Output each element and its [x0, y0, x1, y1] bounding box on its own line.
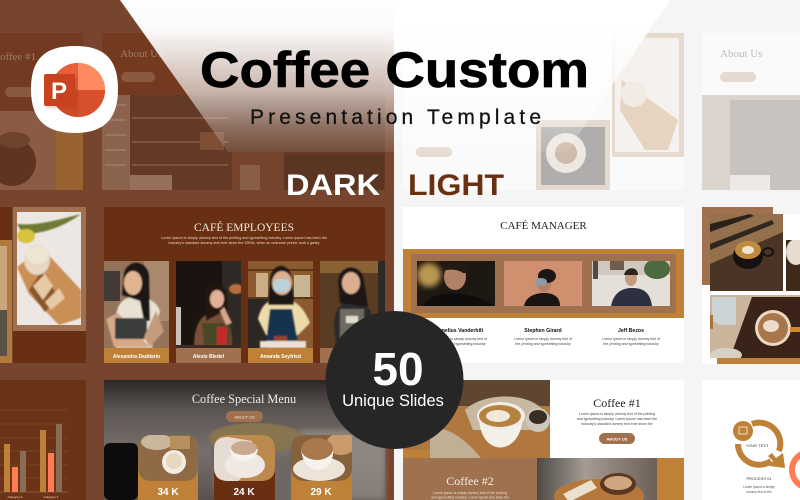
slide: dark coffee #1 (faded): offee #1 [0, 51, 36, 63]
photo: coffee and toast [537, 458, 657, 500]
chart category labels [8, 495, 59, 499]
manager: first column [429, 328, 487, 346]
heading: cafe manager: CAFÉ MANAGER [500, 220, 587, 232]
manager photo 2 [504, 261, 582, 306]
menu card 1: 34 K [157, 487, 179, 498]
panel: coffee #2: and typesetting industry. Lorem Ipsum has been the [431, 496, 509, 500]
employee photo 4 [320, 261, 385, 348]
name tag: Alexandra Daddario [104, 348, 169, 363]
slide: cafe manager [403, 207, 684, 363]
manager: first column: Lorem Ipsum is simply dummy text of [429, 337, 487, 341]
manager: Jeff Bezos [602, 328, 660, 346]
bar chart [4, 424, 62, 492]
slide: dark about us (faded): About Us [120, 48, 162, 60]
heading: cafe employees: CAFÉ EMPLOYEES [194, 220, 294, 234]
manager photo 1 [417, 261, 495, 306]
slide: light about us (faded) [702, 33, 800, 190]
heading: coffee special menu: Coffee Special Menu [192, 392, 296, 406]
photo: white cup on burlap [403, 380, 550, 458]
coffee #1 text: and typesetting industry. Lorem Ipsum has been the [577, 417, 657, 421]
name tag: Amanda Seyfried: Amanda Seyfried [260, 354, 301, 360]
button: about us [599, 433, 635, 444]
badge: 50 unique slides: Unique Slides [342, 392, 444, 410]
button: about us [226, 411, 263, 422]
slide: dark chart [0, 380, 86, 500]
badge: 50 unique slides: 50 [372, 343, 424, 395]
process 01 label: PROCESS 01 [746, 476, 772, 481]
slide: light about us (faded): About Us [720, 48, 762, 60]
panel: coffee #2: Coffee #2 [446, 474, 494, 488]
slide: light photo collage [702, 207, 800, 364]
slide: coffee special menu [104, 380, 385, 500]
slide: light coffee (faded) [403, 33, 684, 190]
photo: latte art top view [710, 295, 800, 358]
employee photo 1 [104, 261, 169, 348]
name tag: Alexandra Daddario: Alexandra Daddario [113, 354, 160, 360]
name tag: Alexis Bledel [176, 348, 241, 363]
menu card 2: 24 K [233, 487, 255, 498]
employees intro text: industry's standard dummy text ever since the 1500s, when an unknown printer took a galley [169, 241, 320, 245]
manager: first column: Cornelius Vanderbilt [433, 328, 483, 334]
manager: Stephen Girard: the printing and typesetting industry [515, 342, 571, 346]
button: about us: ABOUT US [234, 414, 255, 420]
menu card 3: 29 K [310, 487, 332, 498]
process text: dummy text of the [746, 490, 772, 494]
chart category labels: Category 4 [44, 495, 59, 499]
photo: partial coffee [786, 240, 800, 291]
process text: Lorem Ipsum is simply [743, 485, 775, 489]
dark half background [0, 0, 394, 500]
manager photo 3 [592, 261, 670, 306]
button: about us: ABOUT US [607, 436, 628, 442]
manager: Jeff Bezos: Jeff Bezos [618, 328, 644, 334]
badge: 50 unique slides [326, 311, 464, 449]
manager: first column: the printing and typesetting industry [430, 342, 486, 346]
panel: coffee #2: Lorem Ipsum is simply dummy text of the printing [433, 491, 507, 495]
menu card 2 [214, 435, 275, 500]
manager: Stephen Girard [514, 328, 572, 346]
slide: dark about us (faded) [102, 33, 385, 190]
circular arrow [733, 421, 785, 468]
light half background [394, 0, 800, 500]
employee photo 3 [248, 261, 313, 348]
name tag: Alexis Bledel: Alexis Bledel [193, 354, 225, 360]
name tag: Amanda Seyfried [248, 348, 313, 363]
manager: Stephen Girard: Lorem Ipsum is simply dummy text of [514, 337, 572, 341]
coffee #1 text: Lorem Ipsum is simply dummy text of the printing [579, 412, 655, 416]
employee photo 2 [176, 261, 241, 348]
slide: process diagram [702, 380, 800, 500]
slide: dark coffee #1 (faded) [0, 33, 83, 190]
label: light: LIGHT [408, 169, 504, 202]
manager: Jeff Bezos: the printing and typesetting industry [603, 342, 659, 346]
your text label: YOUR TEXT [746, 443, 769, 448]
menu card 3 [291, 433, 356, 500]
label: dark: DARK [286, 169, 380, 202]
icon: PowerPoint logo [31, 46, 118, 133]
slide: dark photo collage [0, 207, 86, 363]
menu card 1 [138, 434, 198, 500]
title: Coffee Custom [200, 42, 589, 98]
coffee #1 text: industry's standard dummy text ever since the [581, 422, 653, 426]
photo: coffee on wood table [710, 214, 783, 291]
slide: coffee #1 and #2 [403, 380, 684, 500]
employees intro text: Lorem Ipsum is simply dummy text of the printing and typesetting industry. Lorem Ipsum has been the [161, 236, 327, 240]
name tag: fourth employee [320, 348, 385, 363]
panel: coffee #2 [403, 458, 537, 500]
orange ring [792, 452, 800, 488]
manager photo band [403, 249, 684, 318]
manager: Stephen Girard: Stephen Girard [524, 328, 562, 334]
icon: PowerPoint logo: P [51, 78, 67, 105]
chart category labels: Category 3 [8, 495, 23, 499]
heading: coffee #1: Coffee #1 [593, 396, 641, 410]
manager: Jeff Bezos: Lorem Ipsum is simply dummy text of [602, 337, 660, 341]
slide: cafe employees [104, 207, 385, 363]
title backdrop fade [120, 0, 670, 152]
subtitle: Presentation Template [250, 106, 541, 129]
